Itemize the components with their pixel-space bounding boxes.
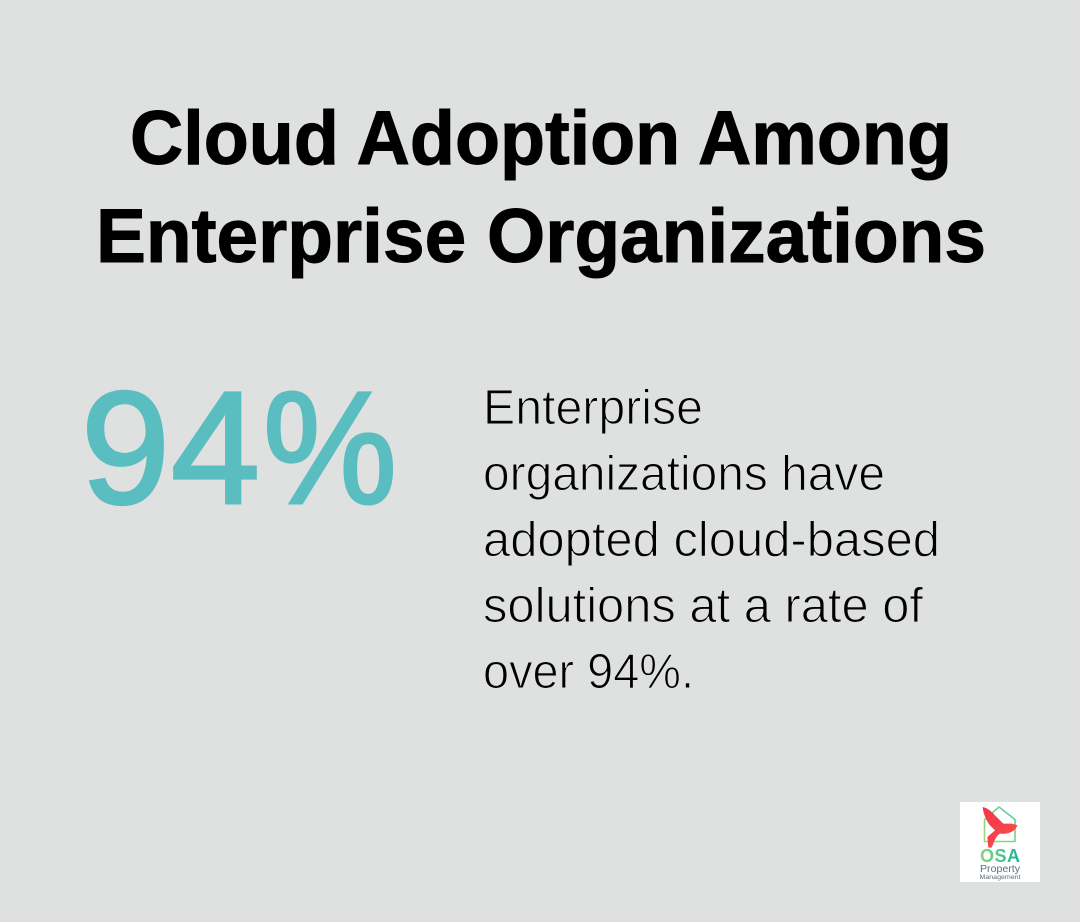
logo wordmark OSA: OSA (980, 846, 1020, 866)
icon: red bird (983, 807, 1018, 848)
title: Cloud Adoption Among (130, 96, 952, 181)
logo: OSA Property Management (960, 802, 1040, 882)
title (96, 96, 986, 279)
big statistic: 94%: 4 (171, 358, 260, 537)
description text: over 94%. (483, 645, 694, 699)
description text: solutions at a rate of (483, 579, 923, 633)
big statistic: 94%: 9 (81, 358, 170, 537)
logo text Property: Property (980, 864, 1020, 875)
big statistic: 94%: % (263, 358, 397, 537)
icon: house outline (984, 807, 1015, 842)
description text: adopted cloud-based (483, 513, 940, 567)
description text: organizations have (483, 447, 885, 501)
title: Enterprise Organizations (96, 194, 986, 279)
logo text Management: Management (980, 874, 1021, 881)
description text: Enterprise (483, 381, 703, 435)
description text (483, 381, 940, 699)
